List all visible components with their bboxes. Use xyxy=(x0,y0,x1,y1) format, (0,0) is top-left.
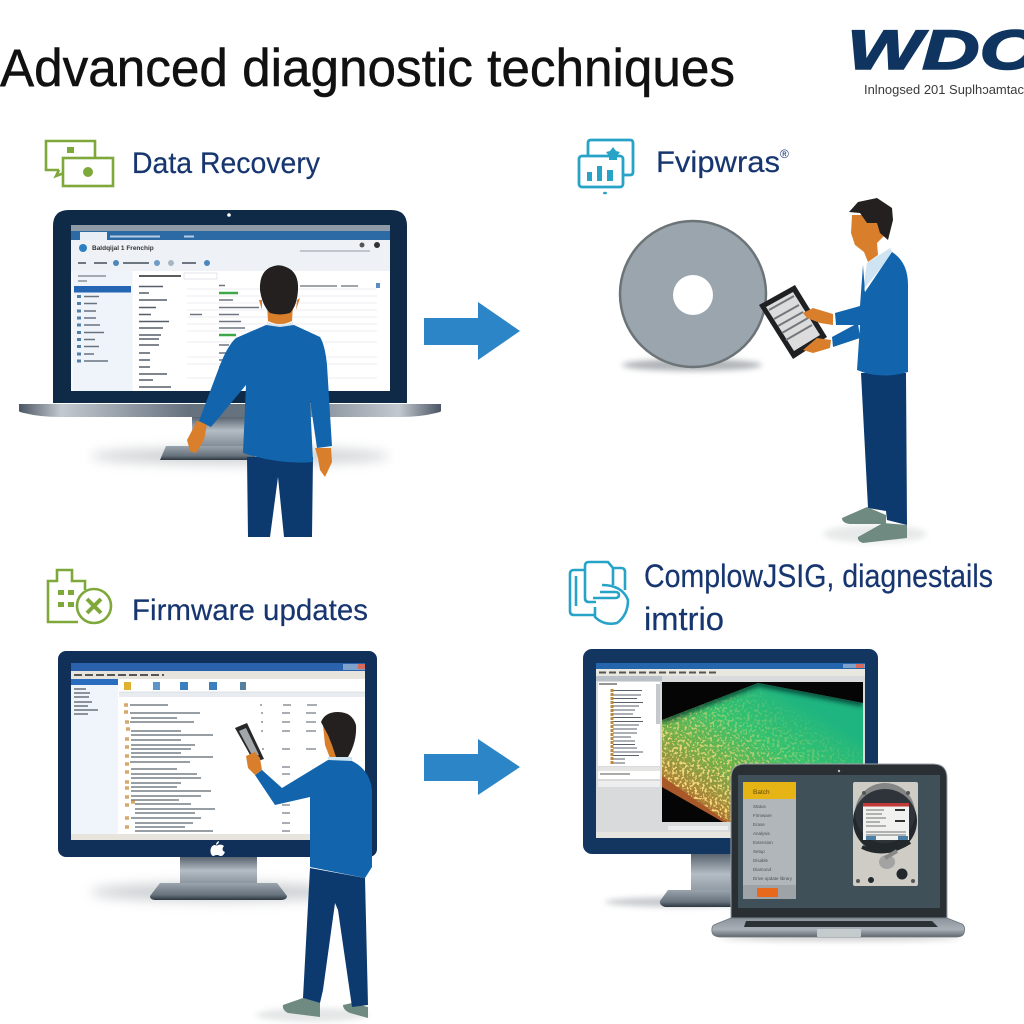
hard drive xyxy=(853,782,918,886)
panel: disc analysis xyxy=(579,140,927,543)
sidebar menu: Setup xyxy=(753,849,765,854)
heading: data recovery: Data Recovery xyxy=(132,147,320,180)
arrow: data recovery to next xyxy=(424,302,520,360)
icon: firmware building with cross xyxy=(48,570,111,623)
panel: complex diagnostics xyxy=(570,558,993,941)
sidebar menu xyxy=(743,782,796,899)
person viewing laptop xyxy=(187,265,332,537)
sidebar menu: Firmware xyxy=(753,813,772,818)
heading: complex diagnostics xyxy=(644,558,993,637)
monitor with 3D surface xyxy=(583,649,878,907)
laptop with software window xyxy=(19,210,441,464)
icon: chart dashboard xyxy=(579,140,633,194)
person with tablet xyxy=(759,198,927,543)
heading: complex diagnostics: imtrio xyxy=(644,601,724,637)
title: Advanced diagnostic techniques xyxy=(0,39,735,98)
arrow: firmware to next xyxy=(424,739,520,795)
phone xyxy=(235,723,264,762)
sidebar menu: Analysis xyxy=(753,831,771,836)
heading: complex diagnostics: ComplowJSIG, diagnestails xyxy=(644,558,993,594)
sidebar menu: Status xyxy=(753,804,767,809)
panel: firmware updates xyxy=(48,570,377,1022)
sidebar menu: Erase xyxy=(753,822,765,827)
sidebar menu: Drive update library xyxy=(753,876,793,881)
heading: Fvipwras: Fvipwras xyxy=(656,146,780,179)
logo: WDC: WDC xyxy=(847,18,1024,81)
laptop with software window: Baldqijal 1 Frenchip xyxy=(92,245,154,252)
tablet xyxy=(759,285,827,359)
laptop with hard drive xyxy=(712,764,965,941)
sidebar menu: Diamond xyxy=(753,867,772,872)
logo: WDC xyxy=(847,18,1024,97)
sidebar menu: Extension xyxy=(753,840,773,845)
person with phone xyxy=(235,712,372,1022)
heading: Fvipwras: ® xyxy=(780,147,789,161)
heading: firmware updates: Firmware updates xyxy=(132,594,368,627)
logo: WDC: Inlnogsed 201 Suplhɔamtac xyxy=(864,82,1024,97)
icon: data recovery windows xyxy=(46,141,113,186)
sidebar menu: Disable xyxy=(753,858,769,863)
panel: data recovery xyxy=(19,141,441,537)
icon: teal documents xyxy=(570,562,628,624)
sidebar menu: Batch xyxy=(753,789,770,796)
disc xyxy=(620,221,766,371)
monitor with file list xyxy=(58,651,377,901)
